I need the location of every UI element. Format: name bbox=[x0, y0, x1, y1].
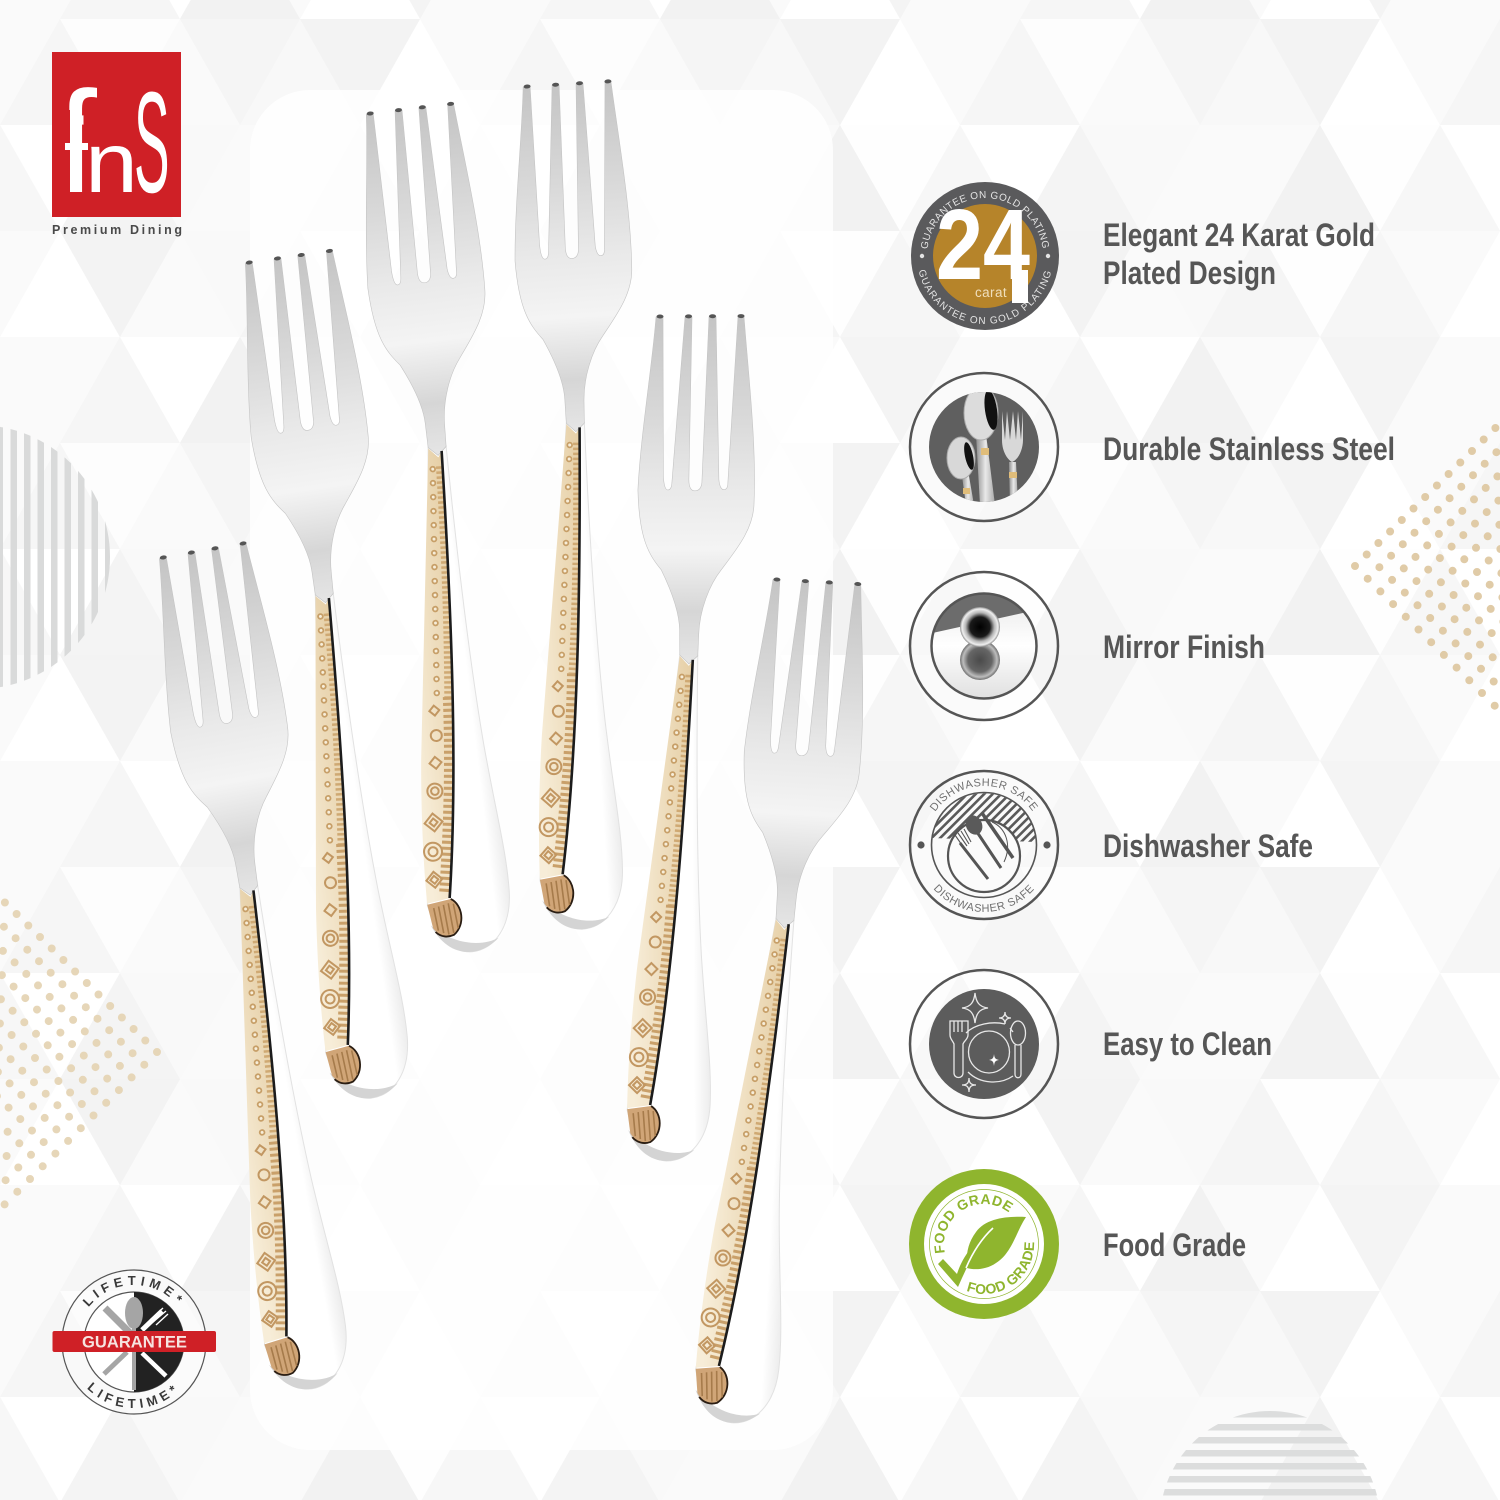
icon: 24 carat gold plating badge: GUARANTEE ON GOLD PLATING bbox=[919, 270, 1050, 324]
fork 3 bbox=[333, 100, 563, 956]
decorative grey stripes semicircle bottom bbox=[1163, 1411, 1377, 1496]
icon: food grade: FOOD GRADE bbox=[967, 1242, 1034, 1294]
text: Elegant 24 Karat Gold Plated Design: Plated Design bbox=[1103, 255, 1276, 291]
decorative gold dots right bbox=[1355, 428, 1500, 716]
logo: FnS Premium Dining: S bbox=[134, 63, 170, 224]
icon: lifetime guarantee badge bbox=[52, 1269, 216, 1415]
icon: lifetime guarantee badge: LIFETIME* bbox=[82, 1276, 182, 1307]
icon: easy to clean bbox=[910, 970, 1058, 1118]
icon: mirror finish bbox=[910, 572, 1058, 720]
text: Elegant 24 Karat Gold Plated Design bbox=[1103, 217, 1375, 291]
fork 2 bbox=[212, 247, 462, 1104]
text: Dishwasher Safe: Dishwasher Safe bbox=[1103, 828, 1313, 864]
icon: 24 carat gold plating badge: 24 bbox=[936, 189, 1030, 301]
logo: FnS Premium Dining bbox=[52, 52, 182, 237]
icon: 24 carat gold plating badge: GUARANTEE ON GOLD PLATING bbox=[921, 191, 1049, 248]
fork 6 bbox=[693, 575, 871, 1428]
icon: food grade: FOOD GRADE bbox=[934, 1194, 1014, 1254]
icon: lifetime guarantee badge: GUARANTEE bbox=[82, 1334, 187, 1352]
icon: dishwasher safe: DISHWASHER SAFE bbox=[930, 778, 1038, 811]
text: Elegant 24 Karat Gold Plated Design: Elegant 24 Karat Gold bbox=[1103, 217, 1375, 253]
icon: lifetime guarantee badge: LIFETIME* bbox=[87, 1382, 174, 1408]
text: Easy to Clean: Easy to Clean bbox=[1103, 1026, 1272, 1062]
decorative grey stripes semicircle left bbox=[0, 420, 112, 700]
text: Mirror Finish: Mirror Finish bbox=[1103, 629, 1265, 665]
icon: durable stainless steel bbox=[910, 373, 1058, 521]
icon: 24 carat gold plating badge: carat bbox=[975, 285, 1007, 300]
fork 5 bbox=[623, 314, 758, 1161]
icon: dishwasher safe: DISHWASHER SAFE bbox=[934, 884, 1034, 912]
icon: 24 carat gold plating badge bbox=[911, 182, 1059, 330]
central white panel bbox=[250, 90, 833, 1450]
icon: food grade bbox=[909, 1169, 1059, 1319]
fork 4 bbox=[490, 79, 674, 932]
text: Food Grade: Food Grade bbox=[1103, 1227, 1246, 1263]
logo: FnS Premium Dining: n bbox=[85, 116, 138, 211]
logo: FnS Premium Dining: f bbox=[56, 61, 98, 223]
logo: FnS Premium Dining: Premium Dining bbox=[52, 223, 182, 237]
fork 1 bbox=[126, 539, 402, 1396]
text: Durable Stainless Steel: Durable Stainless Steel bbox=[1103, 431, 1395, 467]
icon: dishwasher safe bbox=[908, 770, 1060, 920]
decorative gold dots left bbox=[0, 902, 157, 1222]
